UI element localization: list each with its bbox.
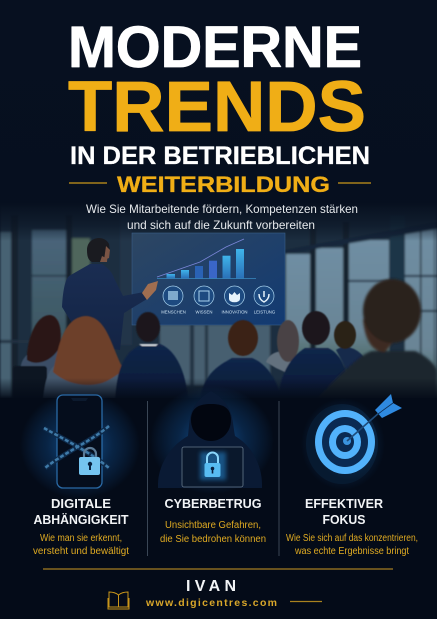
heading: TRENDS: TRENDS [68, 68, 366, 147]
subtitle [86, 202, 358, 232]
presentation screen [132, 233, 285, 325]
windows [0, 205, 437, 405]
panel: effektiver fokus: EFFEKTIVER [305, 496, 384, 511]
panel: effektiver fokus: FOKUS [322, 512, 366, 527]
person: foreground right [315, 279, 437, 400]
panel: cyberbetrug [160, 496, 266, 545]
subtitle: und sich auf die Zukunft vorbereiten [127, 218, 315, 232]
panel: digitale abhängigkeit: DIGITALE [51, 496, 111, 511]
screen labels: INNOVATION [221, 310, 248, 314]
photo: conference room [0, 203, 437, 405]
website: www.digicentres.com [145, 597, 277, 609]
author: IVAN [186, 578, 236, 595]
panel: cyberbetrug: CYBERBETRUG [164, 496, 262, 511]
person: far right [334, 321, 367, 376]
presenter [62, 238, 158, 385]
panel: effektiver fokus: was echte Ergebnisse bringt [294, 546, 409, 557]
person: man centre-left [115, 312, 188, 400]
panel: digitale abhängigkeit [33, 496, 129, 557]
icon: hacker with laptop [150, 386, 274, 494]
icon: book [108, 592, 129, 609]
heading: in der betrieblichen: IN DER BETRIEBLICHEN [70, 142, 370, 170]
audience [13, 279, 437, 400]
panel: digitale abhängigkeit: ABHÄNGIGKEIT [34, 512, 129, 527]
bottom fade [0, 378, 437, 400]
bar chart [157, 239, 256, 279]
icon: phone with chains [20, 391, 140, 499]
screen icons [163, 286, 274, 306]
screen labels: LEISTUNG [254, 310, 276, 314]
title rules [69, 182, 371, 184]
panel: effektiver fokus: Wie Sie sich auf das konzentrieren, [286, 533, 418, 544]
top fade [0, 203, 437, 241]
lower panel background [0, 398, 437, 619]
person: woman right [266, 320, 299, 378]
panel: digitale abhängigkeit: Wie man sie erkennt, [40, 533, 122, 544]
person: woman left [21, 315, 64, 397]
chair left [13, 366, 47, 400]
panel: cyberbetrug: Unsichtbare Gefahren, [165, 520, 261, 531]
subtitle: Wie Sie Mitarbeitende fördern, Kompetenzen stärken [86, 202, 358, 216]
padlock [79, 448, 100, 475]
icon: target with arrow [301, 394, 402, 490]
heading: weiterbildung: WEITERBILDUNG [117, 172, 330, 197]
divider [146, 401, 148, 556]
screen labels: MENSCHEN [161, 310, 186, 314]
lock [200, 452, 226, 480]
person: woman with auburn hair [43, 316, 133, 400]
panel: cyberbetrug: die Sie bedrohen können [160, 534, 266, 545]
divider [278, 401, 280, 556]
person: man centre [200, 320, 282, 400]
heading: MODERNE: MODERNE [68, 15, 362, 80]
panel: digitale abhängigkeit: versteht und bewältigt [33, 546, 129, 557]
footer accent line [290, 600, 322, 602]
footer rule [43, 568, 393, 570]
panel: effektiver fokus [286, 496, 418, 557]
screen labels [161, 310, 276, 314]
title [68, 15, 370, 197]
screen labels: WISSEN [196, 310, 212, 314]
person: man right [278, 311, 349, 400]
